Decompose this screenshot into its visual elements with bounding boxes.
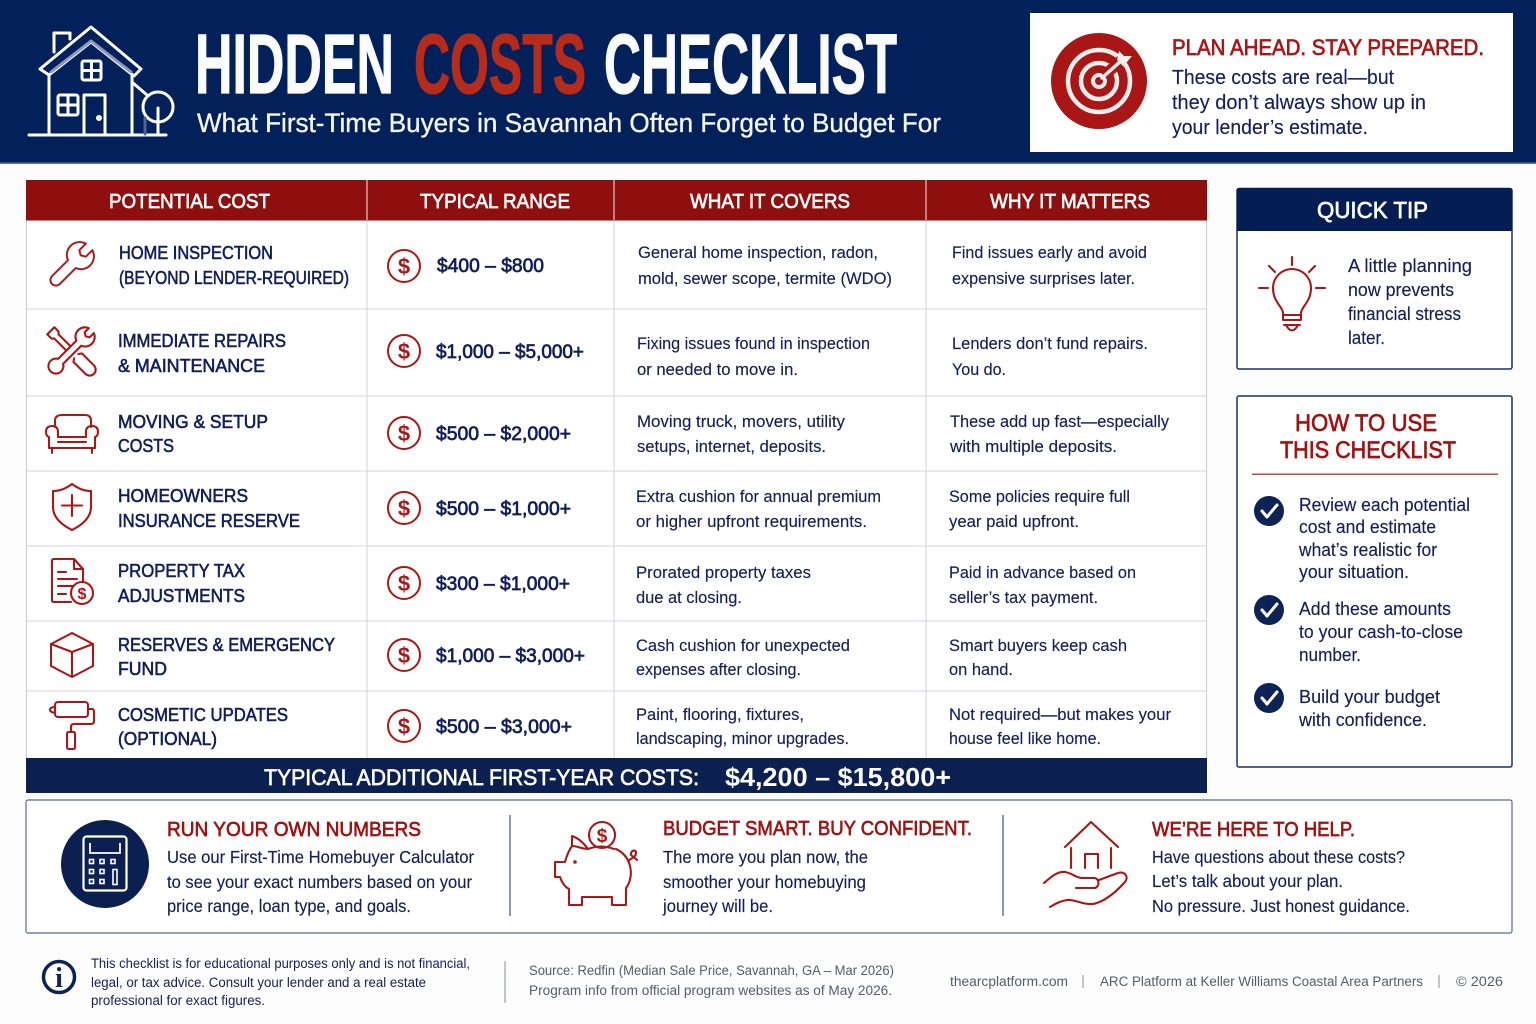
range: $1,000 – $5,000+ [436, 342, 584, 363]
range [388, 417, 571, 449]
cost name: HOMEOWNERS [118, 485, 248, 506]
quick tip text: A little planning [1348, 256, 1472, 276]
table header row: WHY IT MATTERS [990, 191, 1150, 213]
row: moving and setup [46, 411, 1169, 456]
row: property tax [52, 559, 1136, 607]
what it covers: Cash cushion for unexpected [636, 636, 850, 655]
callout text: The more you plan now, the [663, 847, 868, 867]
total bar: TYPICAL ADDITIONAL FIRST-YEAR COSTS: [264, 765, 699, 790]
why it matters: Some policies require full [949, 487, 1130, 506]
what it covers: General home inspection, radon, [638, 243, 878, 262]
step 2: to your cash-to-close [1299, 622, 1463, 642]
row: cosmetic updates [50, 702, 1171, 749]
what it covers: Prorated property taxes [636, 563, 811, 582]
quick tip text [1348, 256, 1472, 348]
range: $300 – $1,000+ [436, 574, 570, 595]
quick tip text: now prevents [1348, 280, 1454, 300]
what it covers: or needed to move in. [637, 360, 798, 379]
icon: calculator [61, 820, 149, 908]
icon: crossed tools [44, 324, 98, 378]
cost name [118, 634, 335, 679]
table header row: WHAT IT COVERS [690, 191, 850, 213]
cost name [118, 485, 300, 531]
why it matters: Not required—but makes your [949, 705, 1171, 724]
cost name: $ [78, 586, 87, 603]
what it covers: Paint, flooring, fixtures, [636, 705, 804, 724]
why it matters [949, 487, 1130, 531]
row: immediate repairs [44, 324, 1148, 379]
callout text: These costs are real—but [1172, 66, 1394, 89]
panel: how to use this checklist [1237, 396, 1512, 767]
callout text: Have questions about these costs? [1152, 847, 1405, 867]
cost name: RESERVES & EMERGENCY [118, 634, 335, 655]
why it matters [949, 563, 1136, 607]
why it matters: expensive surprises later. [952, 269, 1135, 288]
step 2 [1254, 595, 1463, 665]
callout text: No pressure. Just honest guidance. [1152, 896, 1410, 916]
why it matters: Paid in advance based on [949, 563, 1136, 582]
cost name: HOME INSPECTION [119, 242, 273, 263]
what it covers [636, 705, 849, 748]
subtitle: What First-Time Buyers in Savannah Often Forget to Budget For [197, 108, 941, 138]
credits: ARC Platform at Keller Williams Coastal Area Partners [1100, 974, 1423, 989]
why it matters: on hand. [949, 660, 1013, 679]
range [388, 639, 585, 671]
disclaimer: This checklist is for educational purposes only and is not financial, [91, 956, 470, 971]
quick tip text: later. [1348, 328, 1385, 348]
callout text: WE’RE HERE TO HELP. [1152, 818, 1355, 841]
range [388, 567, 570, 599]
row: reserves and emergency fund [51, 633, 1127, 679]
icon: shield [53, 484, 91, 530]
icon: paint roller [50, 702, 94, 749]
why it matters: Smart buyers keep cash [949, 636, 1127, 655]
cost name: & MAINTENANCE [118, 355, 265, 376]
icon: piggy bank with coin [555, 822, 637, 905]
panel: cost table [26, 180, 1207, 793]
what it covers: Fixing issues found in inspection [637, 334, 870, 353]
table header row: POTENTIAL COST [109, 191, 270, 213]
callout text [167, 818, 474, 916]
icon: target [1051, 33, 1147, 129]
range: $500 – $2,000+ [436, 424, 571, 445]
title [195, 17, 897, 111]
step 2: number. [1299, 645, 1361, 665]
range: $1,000 – $3,000+ [436, 646, 585, 667]
source note: Program info from official program websites as of May 2026. [529, 983, 892, 998]
callout: budget smart [555, 817, 972, 916]
icon: sofa [46, 415, 98, 453]
range: $ [398, 496, 410, 521]
icon: wrench [42, 237, 99, 294]
callout text: Use our First-Time Homebuyer Calculator [167, 847, 474, 867]
callout text: price range, loan type, and goals. [167, 896, 411, 916]
icon: piggy bank with coin: $ [597, 826, 608, 847]
callout text: smoother your homebuying [663, 872, 866, 892]
what it covers: landscaping, minor upgrades. [636, 729, 849, 748]
what it covers [637, 334, 870, 379]
step 1: Review each potential [1299, 495, 1470, 515]
cost name: INSURANCE RESERVE [118, 510, 300, 531]
range: $ [398, 714, 410, 739]
range: $ [398, 254, 410, 279]
what it covers: or higher upfront requirements. [636, 512, 867, 531]
callout text: journey will be. [662, 896, 773, 916]
why it matters: Find issues early and avoid [952, 243, 1147, 262]
quick tip text: financial stress [1348, 304, 1461, 324]
step 3: Build your budget [1299, 687, 1440, 707]
cost name [119, 242, 349, 288]
step 1: what’s realistic for [1298, 540, 1437, 560]
credits [950, 974, 1503, 989]
cost name: COSTS [118, 435, 174, 456]
header banner [0, 0, 1536, 164]
what it covers: setups, internet, deposits. [637, 437, 826, 456]
what it covers [636, 563, 811, 607]
callout text: Let’s talk about your plan. [1152, 871, 1343, 891]
step 1: your situation. [1299, 562, 1409, 582]
cost name [118, 704, 288, 749]
cost name [118, 411, 268, 456]
cost name: (OPTIONAL) [118, 728, 217, 749]
step 1: cost and estimate [1299, 517, 1436, 537]
why it matters: You do. [952, 360, 1006, 379]
total bar: $4,200 – $15,800+ [725, 762, 951, 792]
why it matters [949, 412, 1169, 456]
cost name: ADJUSTMENTS [118, 585, 245, 606]
what it covers [637, 412, 845, 456]
row: homeowners insurance [53, 484, 1130, 531]
range: $ [398, 643, 410, 668]
range: $ [398, 339, 410, 364]
what it covers [636, 487, 881, 531]
callout text [1172, 66, 1426, 139]
panel: quick tip [1237, 188, 1512, 369]
table header row [26, 180, 1207, 220]
step 2: Add these amounts [1299, 599, 1451, 619]
step 1 [1254, 495, 1470, 582]
callout text: they don’t always show up in [1172, 91, 1426, 114]
range [388, 492, 571, 524]
credits: © 2026 [1456, 974, 1503, 989]
cost name: IMMEDIATE REPAIRS [118, 330, 286, 351]
why it matters [952, 334, 1148, 379]
how to use heading: THIS CHECKLIST [1280, 437, 1456, 464]
source note: Source: Redfin (Median Sale Price, Savannah, GA – Mar 2026) [529, 963, 894, 978]
row: home inspection [42, 237, 1147, 294]
what it covers: Moving truck, movers, utility [637, 412, 845, 431]
range [388, 335, 584, 367]
callout: plan ahead [1030, 13, 1513, 152]
cost name: MOVING & SETUP [118, 411, 268, 432]
how to use heading: HOW TO USE [1295, 410, 1437, 437]
title: HIDDEN [195, 17, 394, 111]
panel: bottom call-outs [26, 800, 1512, 933]
range: $500 – $1,000+ [436, 499, 571, 520]
icon: light bulb [1259, 257, 1325, 330]
why it matters [949, 636, 1127, 679]
title: COSTS [414, 17, 586, 111]
range: $400 – $800 [437, 256, 544, 277]
callout heading: PLAN AHEAD. STAY PREPARED. [1172, 35, 1484, 60]
cost name: (BEYOND LENDER-REQUIRED) [119, 267, 349, 288]
range: $500 – $3,000+ [436, 717, 572, 738]
total bar [26, 758, 1207, 793]
what it covers: mold, sewer scope, termite (WDO) [638, 269, 892, 288]
cost name: FUND [118, 658, 167, 679]
cost name [118, 330, 286, 376]
callout text: RUN YOUR OWN NUMBERS [167, 818, 421, 841]
what it covers [638, 243, 892, 288]
why it matters: Lenders don’t fund repairs. [952, 334, 1148, 353]
callout text [1152, 818, 1410, 916]
callout text [662, 817, 972, 916]
quick tip heading: QUICK TIP [1317, 197, 1428, 223]
step 3: with confidence. [1298, 710, 1427, 730]
callout text: to see your exact numbers based on your [167, 872, 472, 892]
what it covers: Extra cushion for annual premium [636, 487, 881, 506]
why it matters [949, 705, 1171, 748]
icon: info: i [55, 963, 63, 994]
credits: thearcplatform.com [950, 974, 1068, 989]
icon: box [51, 633, 93, 677]
callout text: BUDGET SMART. BUY CONFIDENT. [663, 817, 972, 840]
callout: here to help [1044, 818, 1410, 916]
what it covers [636, 636, 850, 679]
range: $ [398, 571, 410, 596]
range [388, 250, 544, 282]
why it matters: These add up fast—especially [950, 412, 1169, 431]
callout text: your lender’s estimate. [1172, 116, 1368, 139]
why it matters: with multiple deposits. [949, 437, 1117, 456]
icon: house on hand [1044, 822, 1127, 907]
cost name: PROPERTY TAX [118, 560, 245, 581]
callout: run your own numbers [61, 818, 474, 916]
footer [44, 956, 1503, 1008]
why it matters: year paid upfront. [949, 512, 1079, 531]
why it matters: house feel like home. [949, 729, 1101, 748]
range: $ [398, 421, 410, 446]
why it matters [952, 243, 1147, 288]
step 3 [1254, 683, 1440, 730]
what it covers: expenses after closing. [636, 660, 801, 679]
source note [529, 963, 894, 998]
cost name: COSMETIC UPDATES [118, 704, 288, 725]
icon: tax document [52, 559, 93, 604]
quick tip heading [1237, 188, 1512, 231]
icon: house with tree [29, 27, 173, 135]
title: CHECKLIST [604, 17, 897, 111]
range [388, 710, 572, 742]
cost name [78, 560, 245, 606]
disclaimer: legal, or tax advice. Consult your lender and a real estate [91, 975, 426, 990]
disclaimer: professional for exact figures. [91, 993, 265, 1008]
table header row: TYPICAL RANGE [420, 191, 570, 213]
icon: info [44, 962, 74, 994]
how to use heading [1280, 410, 1456, 464]
disclaimer [91, 956, 470, 1008]
why it matters: seller’s tax payment. [949, 588, 1098, 607]
what it covers: due at closing. [636, 588, 742, 607]
